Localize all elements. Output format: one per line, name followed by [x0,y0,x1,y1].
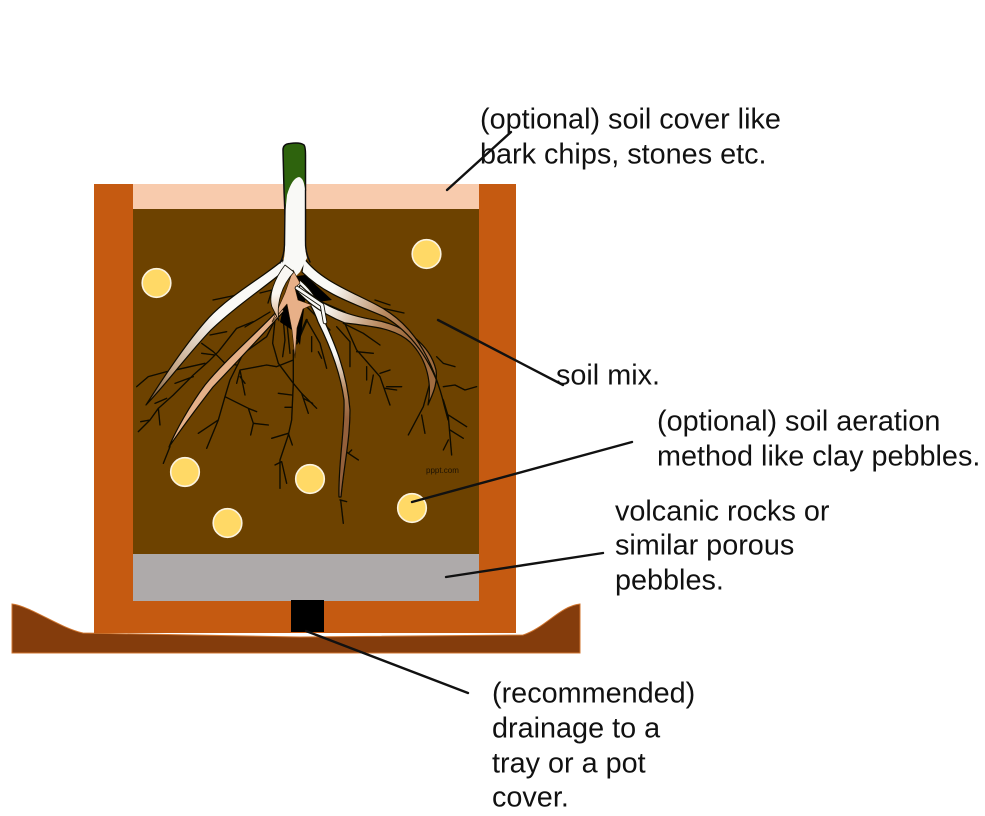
white branch root fill [297,288,325,322]
clay pebbles [142,240,441,537]
label: volcanic rocks: pebbles. [615,564,724,596]
second long root [169,307,284,447]
right main root [302,258,448,420]
pebble [412,240,441,268]
pebble [398,494,426,522]
label: soil mix: soil mix. [556,360,660,392]
pot walls [94,184,516,633]
stem top [283,143,306,215]
fine black rootlets [137,320,477,523]
pot cross-section [94,184,516,633]
label: soil cover: (optional) soil cover like [480,104,781,136]
center right root [296,280,350,497]
right inner root [298,285,436,405]
leader: soil mix [438,320,563,385]
pebble [171,458,199,486]
pebble [296,465,324,493]
plant roots illustration [137,143,477,523]
leader: drainage [306,631,468,693]
label: drainage: (recommended) [492,678,695,710]
white branch root [297,288,325,322]
label: drainage: drainage to a [492,712,661,744]
pebble [142,269,171,297]
porous rock layer [133,554,479,601]
leader lines [306,132,632,693]
label: volcanic rocks: volcanic rocks or [615,496,830,528]
white taproot [282,177,307,280]
soil cover layer [133,184,479,209]
soil mix layer [133,209,479,554]
pebble [213,509,242,537]
label: volcanic rocks: similar porous [615,530,794,562]
label: soil cover: bark chips, stones etc. [480,138,767,170]
left main root [146,260,284,405]
black root crown [280,275,332,345]
white curved side root [271,265,294,321]
leader: aeration [412,442,632,502]
upper rootlets [213,290,404,330]
leader: soil cover [447,132,511,190]
tan root crown [272,270,312,358]
label: drainage: tray or a pot [492,748,646,780]
watermark: pppt.com [426,466,459,475]
label: drainage: cover. [492,782,569,814]
label: soil aeration: (optional) soil aeration [657,406,940,438]
drainage tray [12,604,580,653]
leader: porous rocks [446,553,603,577]
taproot outline [280,190,310,263]
label: soil aeration: method like clay pebbles. [657,440,980,472]
drainage hole [291,600,324,632]
